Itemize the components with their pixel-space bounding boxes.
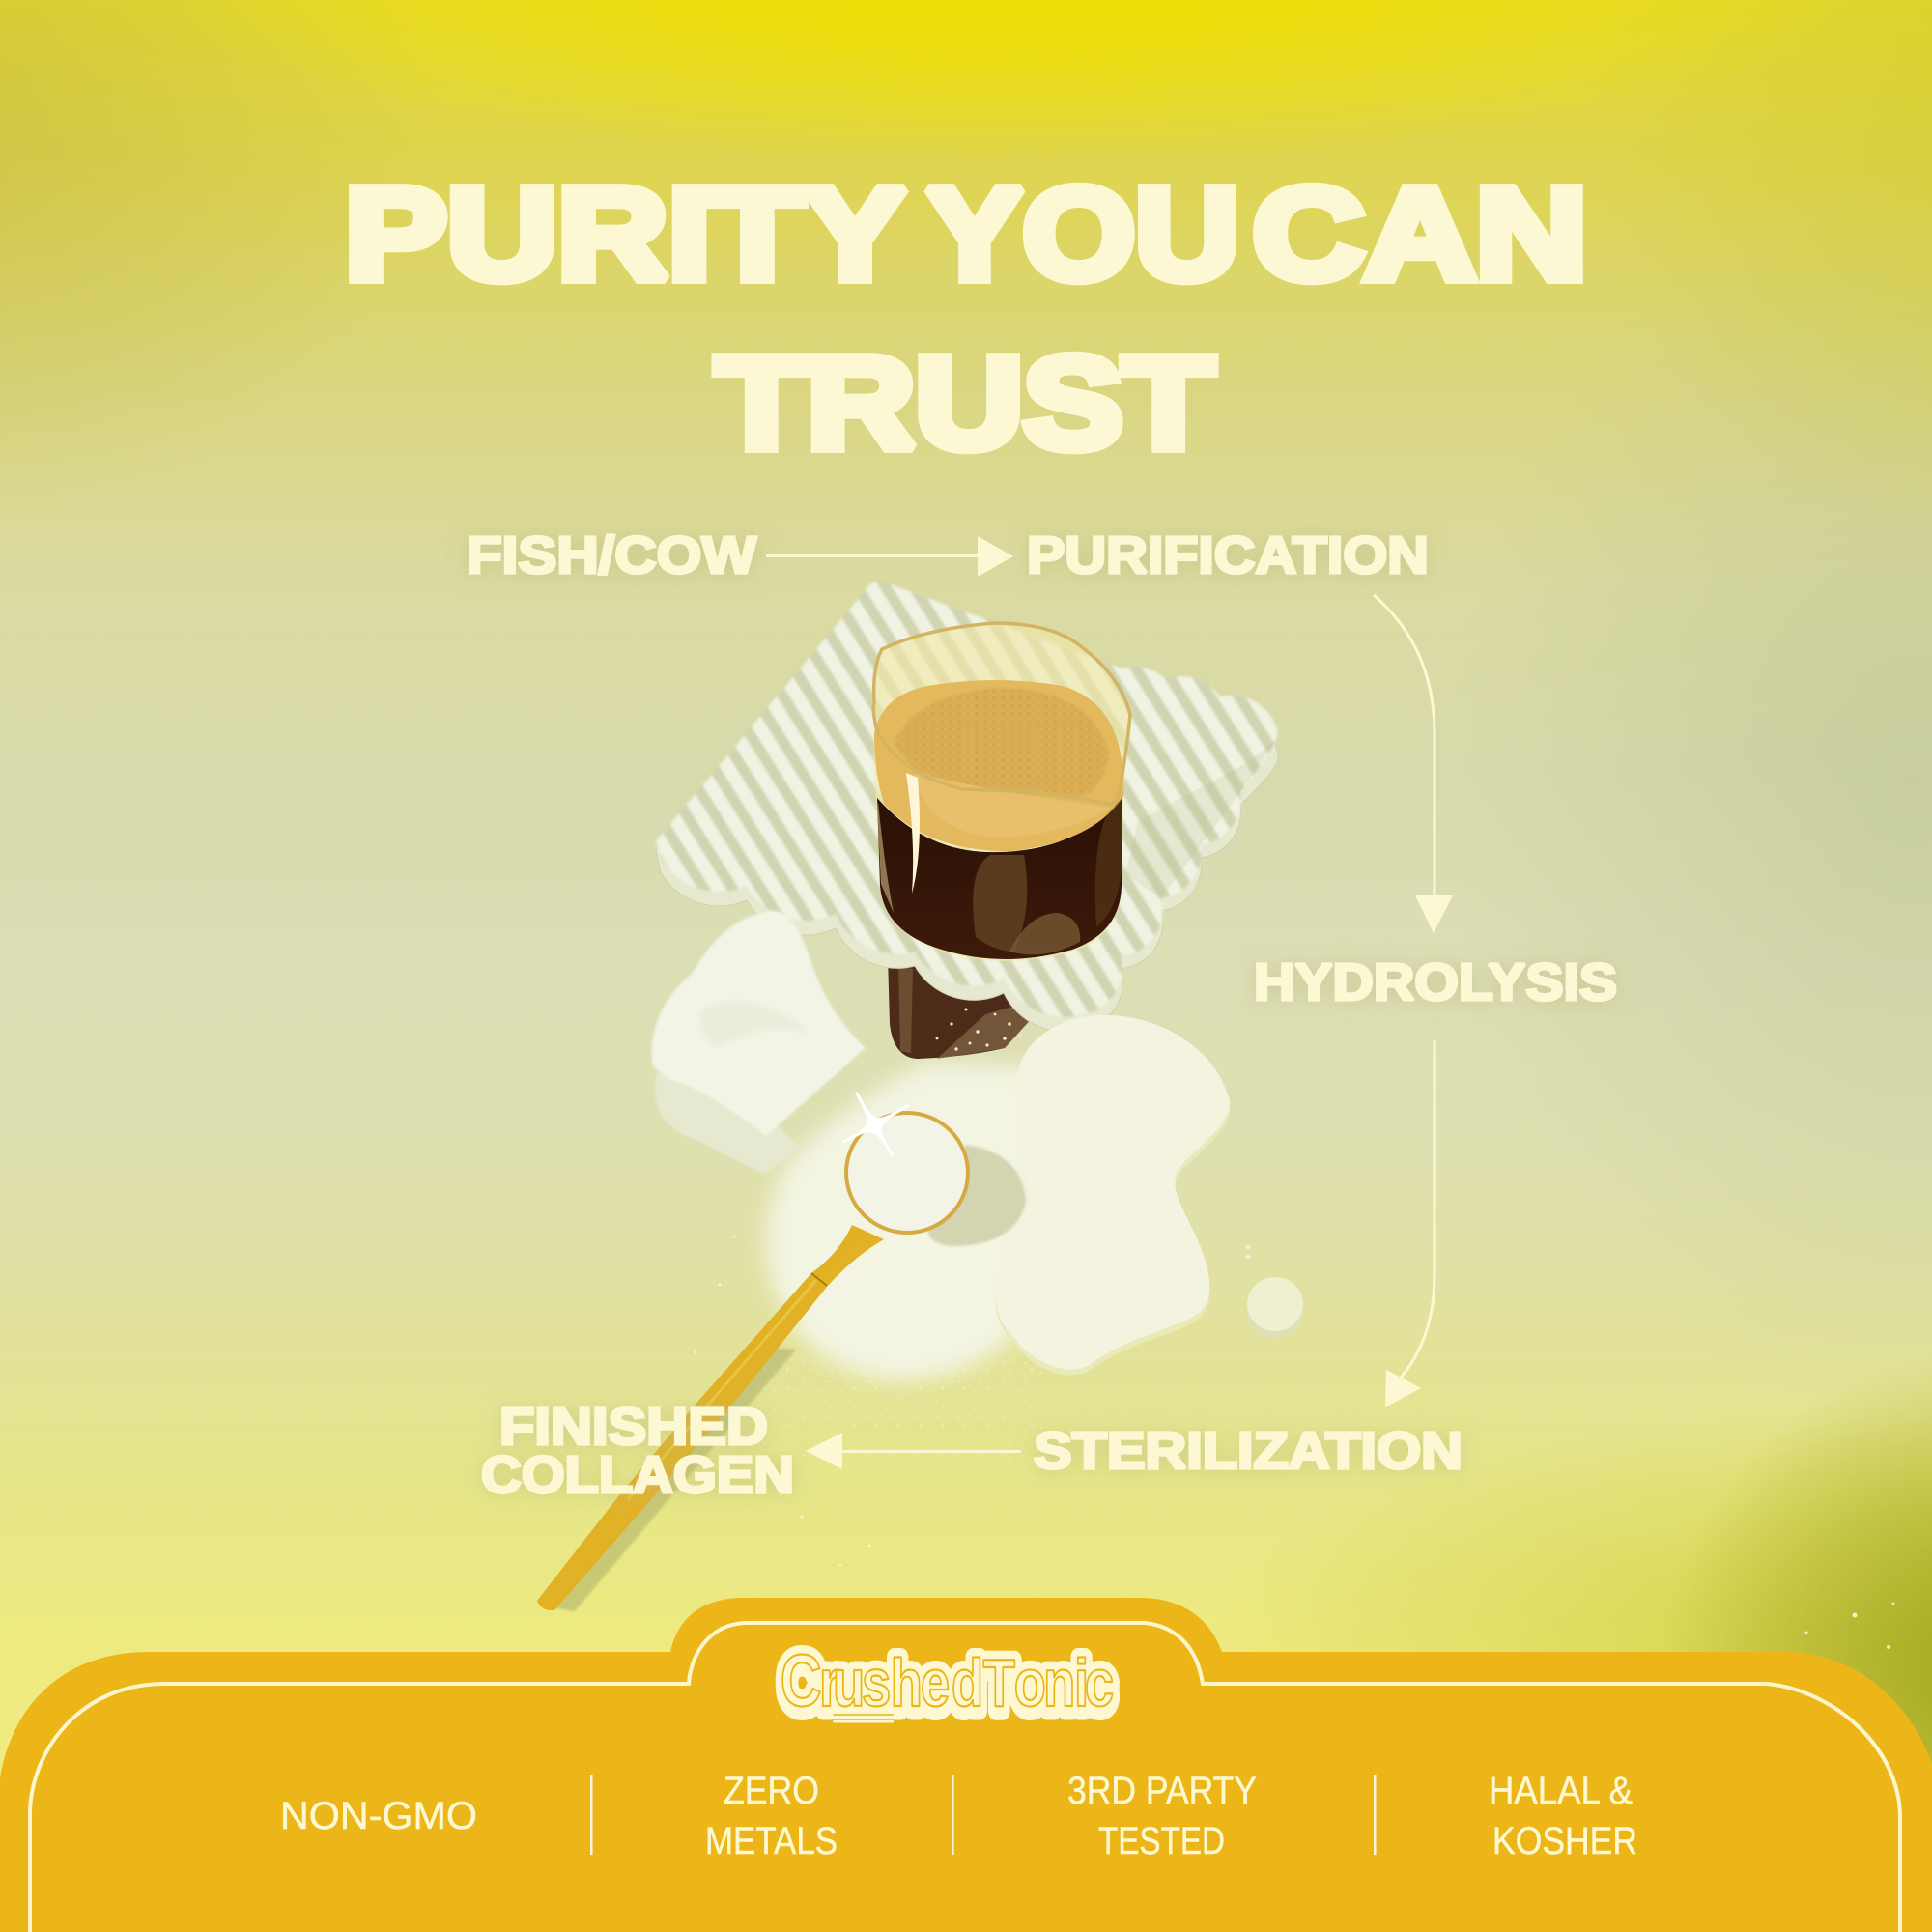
bottom panel [0, 1598, 1932, 1932]
panel inner outline [30, 1623, 1900, 1932]
claim: 3rd party tested: 3RD PARTY [1067, 1770, 1257, 1812]
arrow: purification to hydrolysis [1374, 595, 1453, 933]
claim: halal and kosher: KOSHER [1492, 1820, 1637, 1862]
white crumpled mound [652, 911, 866, 1174]
arrow: sterilization to finished collagen [806, 1433, 1021, 1469]
label: hydrolysis: HYDROLYSIS [1254, 953, 1617, 1011]
label: finished collagen [481, 1398, 794, 1504]
logo: C [781, 1640, 822, 1722]
coffee reflection with sprinkled powder [888, 956, 1053, 1059]
logo: C [781, 1640, 822, 1722]
label: purification: PURIFICATION [1027, 526, 1429, 584]
label: finished collagen: COLLAGEN [481, 1446, 794, 1504]
title [345, 160, 1587, 475]
claim: non-gmo: NON-GMO [280, 1795, 477, 1837]
claim: zero metals [705, 1770, 838, 1862]
label: sterilization: STERILIZATION [1034, 1422, 1463, 1480]
claim: halal and kosher [1489, 1770, 1637, 1862]
logo: rushedTonic [819, 1651, 1114, 1726]
logo: C [781, 1645, 822, 1727]
label: finished collagen: FINISHED [499, 1398, 768, 1456]
powder specks [694, 1235, 1895, 1649]
tablet [1246, 1244, 1304, 1339]
claim: 3rd party tested [1067, 1770, 1257, 1862]
milk puddle [995, 1015, 1230, 1375]
spoon shadow [555, 1145, 1026, 1611]
panel shape [0, 1598, 1932, 1932]
product photo: coffee, collagen powder and spoon [537, 582, 1895, 1649]
claim: 3rd party tested: TESTED [1098, 1820, 1225, 1862]
logo: rushedTonic [819, 1646, 1114, 1721]
powder spill [766, 1063, 1038, 1381]
claim: zero metals: ZERO [724, 1770, 819, 1812]
icon: sparkle [843, 1094, 907, 1155]
arrow: hydrolysis to sterilization [1385, 1040, 1435, 1407]
logo: rushedTonic [819, 1646, 1114, 1721]
arrow: fish/cow to purification [766, 536, 1013, 577]
scalloped striped board [656, 582, 1278, 1032]
title: TRUST [716, 330, 1214, 475]
glass jug with coffee [873, 623, 1130, 961]
title: PURITY [345, 160, 906, 307]
title: YOU [926, 160, 1239, 307]
process flow [467, 526, 1617, 1504]
label: fish/cow: FISH/COW [467, 526, 756, 584]
title: CAN [1253, 160, 1587, 307]
claim: zero metals: METALS [705, 1820, 838, 1862]
spoon [537, 1113, 968, 1610]
powder fallout specks [763, 1352, 1042, 1507]
claim: halal and kosher: HALAL & [1489, 1770, 1633, 1812]
